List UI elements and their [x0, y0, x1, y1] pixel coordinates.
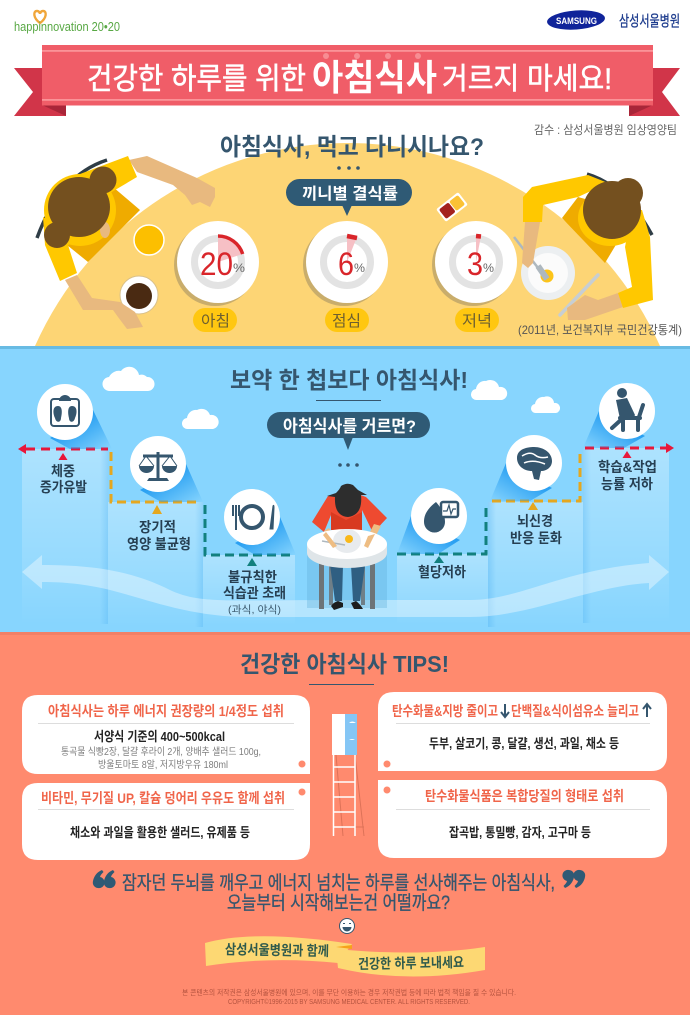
- card: complex carbohydrates: [378, 780, 667, 858]
- label: low blood sugar: 혈당저하: [418, 564, 466, 580]
- card: energy intake: 통곡물 식빵2장, 달걀 후라이 2개, 양배추 샐러드 100g,: [61, 745, 261, 758]
- card: vitamins and milk: [22, 783, 310, 860]
- dots: [338, 463, 359, 467]
- footer copyright: [182, 987, 516, 1006]
- chart: lunch 6%: %: [354, 261, 365, 275]
- logo: happinnovation 20-20: happinnovation 20•20: [14, 20, 120, 34]
- label: lower study and work efficiency: [598, 459, 657, 492]
- supervision credit: 감수 : 삼성서울병원 임상영양팀: [534, 123, 677, 137]
- title text: 아침식사: [312, 57, 437, 98]
- label: irregular eating: 식습관 초래: [223, 585, 286, 601]
- chart: dinner 3%: [432, 221, 517, 306]
- label: weight gain: 체중: [51, 463, 75, 479]
- title text: [87, 57, 612, 98]
- chart: breakfast 20%: %: [233, 261, 245, 275]
- label: lunch: [325, 308, 369, 332]
- label: dinner: [455, 308, 499, 332]
- icon: person studying: [583, 383, 655, 448]
- quote text: [122, 872, 555, 914]
- card: complex carbohydrates: 잡곡밥, 통밀빵, 감자, 고구마 등: [449, 825, 591, 840]
- title text: 건강한 하루를 위한: [87, 63, 306, 96]
- icon: blood drop and monitor: [397, 488, 467, 554]
- icon: bathroom scale: [37, 384, 112, 449]
- label: weight gain: [40, 463, 87, 495]
- label: irregular eating: [223, 569, 286, 616]
- logo: Samsung: SAMSUNG: [556, 16, 597, 27]
- card: vitamins and milk: 채소와 과일을 활용한 샐러드, 유제품 등: [70, 825, 250, 840]
- dots: [337, 166, 360, 170]
- bubble: skipping rate per meal: 끼니별 결식률: [302, 185, 398, 203]
- label: lower study and work efficiency: 학습&작업: [598, 459, 657, 475]
- quote text: 오늘부터 시작해보는건 어떨까요?: [227, 892, 450, 914]
- label: nutrition imbalance: [127, 519, 191, 552]
- illustration: woman with coffee: [37, 156, 215, 329]
- chart: lunch 6%: 6: [338, 246, 354, 282]
- label: lunch: 점심: [332, 312, 361, 330]
- label: weight gain: 증가유발: [40, 479, 87, 495]
- table: yellow semicircle: [35, 143, 660, 346]
- card: reduce carbs, raise protein: 두부, 살코기, 콩, 달걀, 생선, 과일, 채소 등: [429, 736, 619, 751]
- label: slower nerve response: 뇌신경: [517, 513, 553, 529]
- label: lower study and work efficiency: 능률 저하: [601, 476, 653, 492]
- label: breakfast: 아침: [201, 312, 230, 330]
- heading: breakfast over tonic: 보약 한 첩보다 아침식사!: [230, 367, 468, 393]
- card: vitamins and milk: 비타민, 무기질 UP, 칼슘 덩어리 우유도 함께 섭취: [41, 790, 285, 806]
- icon: brain: [490, 435, 562, 501]
- ribbon: have a healthy day: 건강한 하루 보내세요: [358, 954, 464, 972]
- card: complex carbohydrates: 탄수화물식품은 복합당질의 형태로 섭취: [425, 788, 624, 804]
- chart: dinner 3%: %: [483, 261, 494, 275]
- panel: blue section: [0, 346, 690, 632]
- label: nutrition imbalance: 장기적: [139, 519, 176, 535]
- quote text: 잠자던 두뇌를 깨우고 에너지 넘치는 하루를 선사해주는 아침식사,: [122, 872, 555, 894]
- card: reduce carbs, raise protein: 탄수화물&지방 줄이고: [392, 703, 498, 719]
- label: irregular eating: 불규칙한: [228, 569, 277, 585]
- footer copyright: COPYRIGHT©1996-2015 BY SAMSUNG MEDICAL CENTER. ALL RIGHTS RESERVED.: [228, 997, 470, 1006]
- heading: skipping breakfast: 아침식사, 먹고 다니시나요?: [220, 134, 484, 161]
- dashed step lines: [26, 448, 668, 555]
- chart: breakfast 20%: 20: [200, 246, 233, 282]
- panel: tips section: [0, 632, 690, 1015]
- title banner: [14, 45, 680, 116]
- card: energy intake: 방울토마토 8알, 저지방우유 180ml: [98, 759, 228, 771]
- chart: breakfast 20%: [174, 221, 259, 306]
- clouds: [102, 367, 560, 429]
- bubble: if you skip breakfast: [267, 412, 430, 450]
- labels: step effects: [40, 459, 657, 616]
- label: irregular eating: (과식, 야식): [228, 603, 281, 616]
- ribbon: with Samsung Medical Center: 삼성서울병원과 함께: [225, 941, 329, 959]
- ribbon: with Samsung Medical Center: [205, 936, 352, 966]
- icon: balance scale: [130, 436, 203, 502]
- chart: dinner 3%: 3: [467, 246, 483, 282]
- label: breakfast: [193, 308, 237, 332]
- illustration: person at table: [307, 484, 387, 610]
- logo: Samsung: [546, 9, 606, 31]
- ribbon: have a healthy day: [336, 947, 485, 977]
- label: slower nerve response: [510, 513, 562, 546]
- source note: (2011년, 보건복지부 국민건강통계): [518, 323, 682, 337]
- card: energy intake: 아침식사는 하루 에너지 권장량의 1/4정도 섭취: [48, 703, 284, 719]
- illustration: ladder to window: [332, 714, 364, 836]
- bubble: if you skip breakfast: 아침식사를 거르면?: [283, 417, 416, 436]
- card: reduce carbs, raise protein: [378, 692, 667, 771]
- footer copyright: 본 콘텐츠의 저작권은 삼성서울병원에 있으며, 이를 무단 이용하는 경우 저작권법 등에 따라 법적 책임을 질 수 있습니다.: [182, 987, 516, 997]
- icon: sauce dishes: [436, 192, 468, 222]
- illustration: woman with egg plate: [514, 174, 653, 320]
- icon: smile: [340, 918, 354, 934]
- arrowheads and markers: [18, 443, 674, 566]
- title text: 거르지 마세요!: [442, 63, 612, 96]
- chart: lunch 6%: [303, 221, 388, 306]
- heading: breakfast tips: 건강한 아침식사 TIPS!: [240, 651, 449, 677]
- label: slower nerve response: 반응 둔화: [510, 530, 562, 546]
- card: energy intake: [22, 695, 310, 774]
- label: dinner: 저녁: [462, 312, 492, 330]
- closing quote: [93, 870, 585, 914]
- logo: happinnovation 20-20: [14, 11, 120, 34]
- bubble: skipping rate per meal: [286, 179, 412, 216]
- icon: plate with fork and knife: [224, 489, 296, 555]
- quote marks: [93, 870, 585, 888]
- card: energy intake: 서양식 기준의 400~500kcal: [94, 729, 225, 744]
- card: reduce carbs, raise protein: 단백질&식이섬유소 늘리고: [511, 703, 639, 719]
- step columns: [22, 448, 669, 627]
- label: nutrition imbalance: 영양 불균형: [127, 536, 191, 552]
- wave arrows: [22, 555, 669, 617]
